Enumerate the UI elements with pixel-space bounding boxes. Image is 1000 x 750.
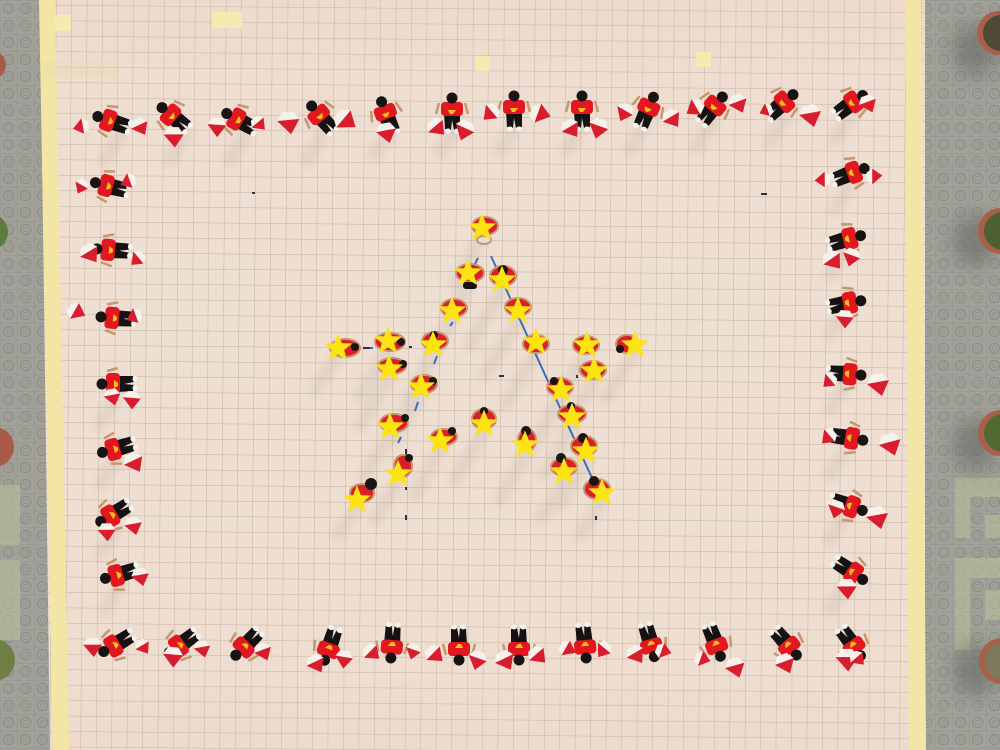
dancer [73, 100, 151, 144]
dancer [827, 617, 877, 673]
top row of flag dancers [73, 79, 878, 149]
dancer [761, 617, 812, 676]
dancer [555, 621, 615, 665]
dancer [423, 92, 478, 144]
green ground tiles, right and left [0, 478, 1000, 650]
guide lines on the floor [252, 193, 767, 520]
dancer [148, 92, 200, 149]
star dancer [454, 258, 484, 289]
star dancer [547, 376, 575, 402]
dancer [818, 356, 889, 396]
star dancer [384, 454, 413, 486]
star dancer [343, 478, 377, 512]
dancer [70, 166, 137, 207]
dancer [81, 620, 153, 668]
star dancer [504, 296, 532, 323]
star dancer [376, 412, 409, 439]
dancer [819, 219, 870, 274]
star dancer [324, 334, 360, 360]
dancer [823, 284, 869, 330]
dancer [93, 428, 146, 475]
dancer [492, 624, 550, 673]
dancer [304, 621, 355, 676]
star dancer [488, 265, 516, 292]
dancer [359, 621, 423, 666]
dancer [823, 483, 888, 529]
star dancer [580, 356, 608, 383]
dancer [623, 618, 674, 667]
dancer [205, 97, 269, 145]
dancer [88, 490, 142, 542]
dancer [63, 300, 143, 336]
star dancer [616, 330, 649, 357]
dancer [558, 90, 611, 142]
dancer [421, 624, 490, 673]
central star formation: dancers holding yellow stars [324, 214, 649, 512]
star dancer [375, 354, 407, 381]
star dancer [438, 296, 467, 323]
star dancer [584, 476, 616, 505]
star dancer [419, 330, 448, 357]
star dancer [470, 407, 498, 436]
dancer [814, 152, 883, 196]
star dancer [573, 330, 601, 357]
star dancer [468, 214, 498, 244]
dancer [156, 619, 210, 669]
dancer [682, 83, 749, 135]
star dancer [571, 433, 600, 463]
dancer [478, 90, 554, 132]
soft diagonal shadows [100, 115, 850, 610]
dancer [96, 368, 142, 411]
star dancer [511, 426, 539, 457]
pale replaced tiles [42, 12, 711, 78]
star dancer [426, 426, 457, 453]
dancer [221, 619, 273, 670]
star dancer [407, 372, 437, 399]
dancer [77, 232, 148, 269]
star dancer [374, 326, 405, 353]
star dancer [522, 328, 550, 354]
dancer [824, 79, 878, 129]
star dancer [550, 453, 578, 484]
dancer [824, 546, 876, 601]
dancer [691, 617, 746, 679]
dancer [365, 91, 409, 143]
star dancer [558, 402, 586, 429]
left column of flag dancers [63, 166, 149, 595]
dancer [276, 92, 361, 144]
dancer [755, 79, 821, 130]
bottom row of flag dancers [81, 617, 877, 679]
dancer [96, 554, 149, 595]
dancer [816, 418, 902, 457]
dancer [611, 85, 684, 136]
right column of flag dancers [814, 152, 902, 601]
